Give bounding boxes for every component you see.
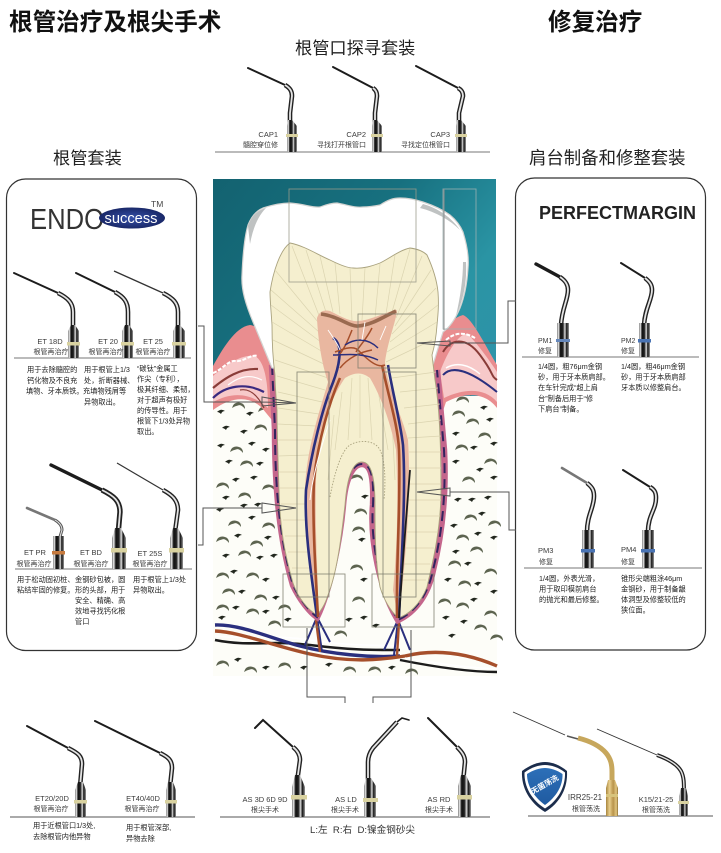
row: apical surgery tips bbox=[220, 718, 490, 836]
tip: AS RD: AS RD bbox=[428, 795, 451, 804]
title: restorative treatment: 修复治疗 bbox=[548, 9, 642, 36]
logo: PERFECTMARGIN: PERFECTMARGIN bbox=[539, 203, 696, 223]
tip: PM4 bbox=[621, 470, 656, 568]
description: PM3: 用于取印模前肩台 bbox=[539, 584, 597, 594]
logo: ENDO success: success bbox=[104, 210, 158, 227]
connector: bottom bracket right bbox=[373, 630, 411, 703]
tip: ET BD: ET BD bbox=[80, 548, 103, 557]
row: irrigation tips bbox=[513, 712, 713, 816]
tip: K15/21-25: 根管荡洗 bbox=[642, 805, 670, 814]
tip: CAP1: CAP1 bbox=[258, 130, 278, 139]
tip: CAP3: CAP3 bbox=[430, 130, 450, 139]
description: PM1: 下肩台”制备。 bbox=[538, 404, 584, 413]
pulp vessels and nerves bbox=[306, 322, 410, 618]
tip: ET 18D: 根管再治疗 bbox=[34, 347, 68, 356]
description: ET20/20D: 去除根管内他异物 bbox=[33, 832, 91, 841]
tip: IRR25-21: 根管荡洗 bbox=[572, 804, 600, 813]
tip: ET40/40D: ET40/40D bbox=[126, 794, 160, 803]
connector: top-right callout bbox=[417, 301, 516, 346]
panel frame bbox=[516, 178, 706, 650]
tip: AS LD: 根尖手术 bbox=[331, 805, 359, 814]
periodontal ligament bbox=[272, 365, 445, 620]
logo: ENDO success bbox=[30, 199, 165, 236]
connector: bottom-right callout bbox=[417, 488, 516, 530]
description: PM4: 锥形尖端粗涂46μm bbox=[621, 574, 682, 583]
tip: ET 18D: ET 18D bbox=[37, 337, 63, 346]
description: ET 20: 用于根管上1/3 bbox=[84, 365, 130, 374]
tip: PM3: PM3 bbox=[538, 546, 553, 555]
tip: PM2: 修复 bbox=[621, 346, 635, 355]
badge: shield bbox=[522, 762, 567, 812]
tip: PM4: 修复 bbox=[621, 557, 635, 566]
connector: top-left callout bbox=[198, 326, 296, 406]
tip: ET BD: 根管再治疗 bbox=[74, 559, 108, 568]
panel: PERFECTMARGIN shoulder kit bbox=[516, 178, 706, 650]
tip: PM1: 修复 bbox=[538, 346, 552, 355]
pulp chamber and canals bbox=[305, 310, 409, 618]
tip: K15/21-25: K15/21-25 bbox=[639, 795, 673, 804]
description: ET 25S: 异物取出。 bbox=[133, 586, 169, 594]
locator boxes bbox=[283, 189, 476, 627]
panel: canal orifice tips bbox=[215, 66, 490, 152]
tip: CAP3: 寻找定位根管口 bbox=[401, 140, 450, 149]
tip: PM2 bbox=[621, 263, 652, 357]
tip: PM3 bbox=[538, 468, 595, 568]
description: PM1: 台”制备后用于“修 bbox=[538, 394, 593, 403]
description: PM1: 砂，用于牙本质肩部。 bbox=[538, 373, 610, 382]
description: PM4: 体洞型及修整较低的 bbox=[621, 595, 686, 604]
description: ET 20: 充填物残屑等 bbox=[83, 387, 126, 396]
furcation dome bbox=[330, 441, 385, 500]
description: ET 18D: 钙化物及不良充 bbox=[27, 376, 77, 385]
description: ET BD: 金钢砂包被，圆 bbox=[75, 575, 125, 584]
tip: AS RD bbox=[425, 718, 472, 817]
tip: ET 25S bbox=[117, 463, 184, 569]
badge: shield: 无菌荡洗 bbox=[529, 772, 560, 796]
description: ET 25: 对于超声有极好 bbox=[137, 396, 187, 404]
tip: ET20/20D bbox=[27, 726, 87, 817]
tip: PM3: 修复 bbox=[539, 557, 553, 566]
description: ET PR: 粘结牢固的修复。 bbox=[17, 586, 75, 594]
tip: CAP2 bbox=[317, 67, 383, 152]
panel frame bbox=[6, 179, 196, 650]
tip: ET 25: ET 25 bbox=[143, 337, 163, 346]
description: ET 25: 取出。 bbox=[137, 427, 159, 436]
tip: PM1 bbox=[536, 264, 570, 357]
description: ET40/40D: 用于根管深部, bbox=[126, 823, 171, 832]
description: PM2: 砂，用于牙本质肩部 bbox=[621, 373, 686, 382]
heading: shoulder preparation kit: 肩台制备和修整套装 bbox=[529, 148, 686, 168]
description: PM3: 1/4圆，外表光滑， bbox=[539, 574, 599, 583]
description: ET 20: 异物取出。 bbox=[84, 397, 120, 406]
description: ET BD: 安全、精确、高 bbox=[75, 596, 125, 605]
tip: ET PR: 根管再治疗 bbox=[16, 559, 52, 568]
description: PM1: 在车针完成“超上肩 bbox=[538, 383, 598, 392]
description: ET 25: 根管下1/3处异物 bbox=[137, 416, 190, 426]
tip: CAP2: 寻找打开根管口 bbox=[317, 140, 366, 149]
tip: ET40/40D bbox=[95, 721, 177, 817]
tip: CAP2: CAP2 bbox=[346, 130, 366, 139]
tip: ET BD bbox=[51, 465, 127, 569]
description: PM4: 金钢砂，用于制备龈 bbox=[621, 584, 686, 594]
tip: PM2: PM2 bbox=[621, 338, 636, 345]
tip: ET 20 bbox=[76, 273, 134, 358]
description: ET 25: 的传导性。用于 bbox=[137, 406, 187, 415]
dentin tubules bbox=[271, 246, 441, 580]
description: PM2: 1/4圆，粗46μm金钢 bbox=[621, 362, 685, 371]
description: ET PR: 用于松动固初桩、 bbox=[17, 575, 75, 584]
illustration: tooth cross-section bbox=[213, 179, 503, 676]
tip: K15/21-25 bbox=[597, 729, 689, 816]
tip: AS 3D 6D 9D: 根尖手术 bbox=[251, 805, 279, 814]
description: ET40/40D: 异物去除 bbox=[126, 834, 155, 843]
description: PM3: 的抛光和最后修整。 bbox=[539, 595, 604, 604]
bone bbox=[213, 396, 497, 676]
description: ET BD: 形的头部，用于 bbox=[75, 586, 125, 594]
tip: AS 3D 6D 9D: AS 3D 6D 9D bbox=[242, 795, 288, 804]
description: ET 25: 极其纤细、柔韧， bbox=[137, 385, 195, 394]
heading: root canal kit: 根管套装 bbox=[53, 148, 122, 168]
row: bottom root canal tips bbox=[10, 721, 195, 843]
description: ET BD: 效地寻找钙化根 bbox=[75, 606, 125, 616]
tip: ET 20: 根管再治疗 bbox=[88, 347, 124, 356]
tip: CAP1 bbox=[243, 68, 298, 152]
tip: PM4: PM4 bbox=[621, 545, 636, 554]
tip: ET PR bbox=[16, 508, 65, 569]
description: ET 20: 处，折断器械、 bbox=[84, 376, 134, 385]
description: ET 18D: 填物、牙本质铁。 bbox=[26, 387, 84, 396]
tip: CAP3 bbox=[401, 66, 467, 152]
gum: right bbox=[432, 315, 497, 432]
tip: ET 25S: ET 25S bbox=[138, 549, 162, 558]
tip: ET 25S: 根管再治疗 bbox=[132, 559, 168, 568]
tip: IRR25-21: IRR25-21 bbox=[568, 793, 603, 802]
tip: AS LD: AS LD bbox=[335, 795, 357, 804]
tip: ET 25: 根管再治疗 bbox=[136, 347, 170, 356]
logo: ENDO success: TM bbox=[151, 199, 163, 209]
legend note: L:左 R:右 D:镍金钢砂尖 bbox=[310, 824, 415, 836]
tip: AS 3D 6D 9D bbox=[242, 720, 307, 817]
tip: ET20/20D: 根管再治疗 bbox=[34, 804, 68, 813]
crown edge shading bbox=[248, 204, 466, 316]
panel: ENDO SUCCESS root canal kit bbox=[6, 179, 196, 650]
tip: ET 18D bbox=[14, 273, 80, 358]
bone specks bbox=[216, 391, 503, 675]
connector: bottom-left callout bbox=[198, 503, 296, 545]
tip: AS RD: 根尖手术 bbox=[425, 805, 453, 814]
gum: left bbox=[213, 325, 276, 425]
description: ET 25: “碳钛”金属工 bbox=[137, 364, 178, 373]
tip: ET20/20D: ET20/20D bbox=[35, 794, 69, 803]
heading: canal orifice kit: 根管口探寻套装 bbox=[295, 38, 415, 58]
logo: ENDO success: ENDO bbox=[30, 204, 104, 236]
description: ET 25S: 用于根管上1/3处 bbox=[133, 575, 186, 584]
tip: ET PR: ET PR bbox=[24, 548, 47, 557]
description: PM2: 牙本质以修整肩台。 bbox=[621, 383, 686, 392]
pulp roof shading bbox=[321, 311, 396, 326]
description: ET 25: 作尖（专利）， bbox=[137, 374, 184, 384]
description: PM4: 狭位面。 bbox=[621, 606, 650, 614]
tip: CAP1: 髓腔穿位修 bbox=[243, 140, 278, 149]
tip: AS LD bbox=[331, 718, 409, 817]
dentin bbox=[270, 243, 441, 618]
teal background bbox=[213, 179, 496, 419]
connector: bottom bracket left bbox=[307, 628, 345, 703]
crown enamel bbox=[242, 198, 468, 368]
description: PM1: 1/4圆，粗76μm金钢 bbox=[538, 362, 602, 371]
title: root canal and apical surgery: 根管治疗及根尖手术 bbox=[9, 9, 222, 36]
tip: PM1: PM1 bbox=[538, 338, 552, 345]
tip: ET 20: ET 20 bbox=[98, 337, 118, 346]
tip: ET40/40D: 根管再治疗 bbox=[124, 804, 160, 813]
description: ET 18D: 用于去除髓腔的 bbox=[27, 365, 77, 374]
description: ET BD: 管口 bbox=[75, 617, 89, 626]
description: ET20/20D: 用于近根管口1/3处, bbox=[33, 821, 95, 830]
tip: IRR25-21 bbox=[513, 712, 618, 816]
nerve and vessel bundle bbox=[215, 617, 497, 672]
tip: ET 25 bbox=[114, 271, 186, 358]
